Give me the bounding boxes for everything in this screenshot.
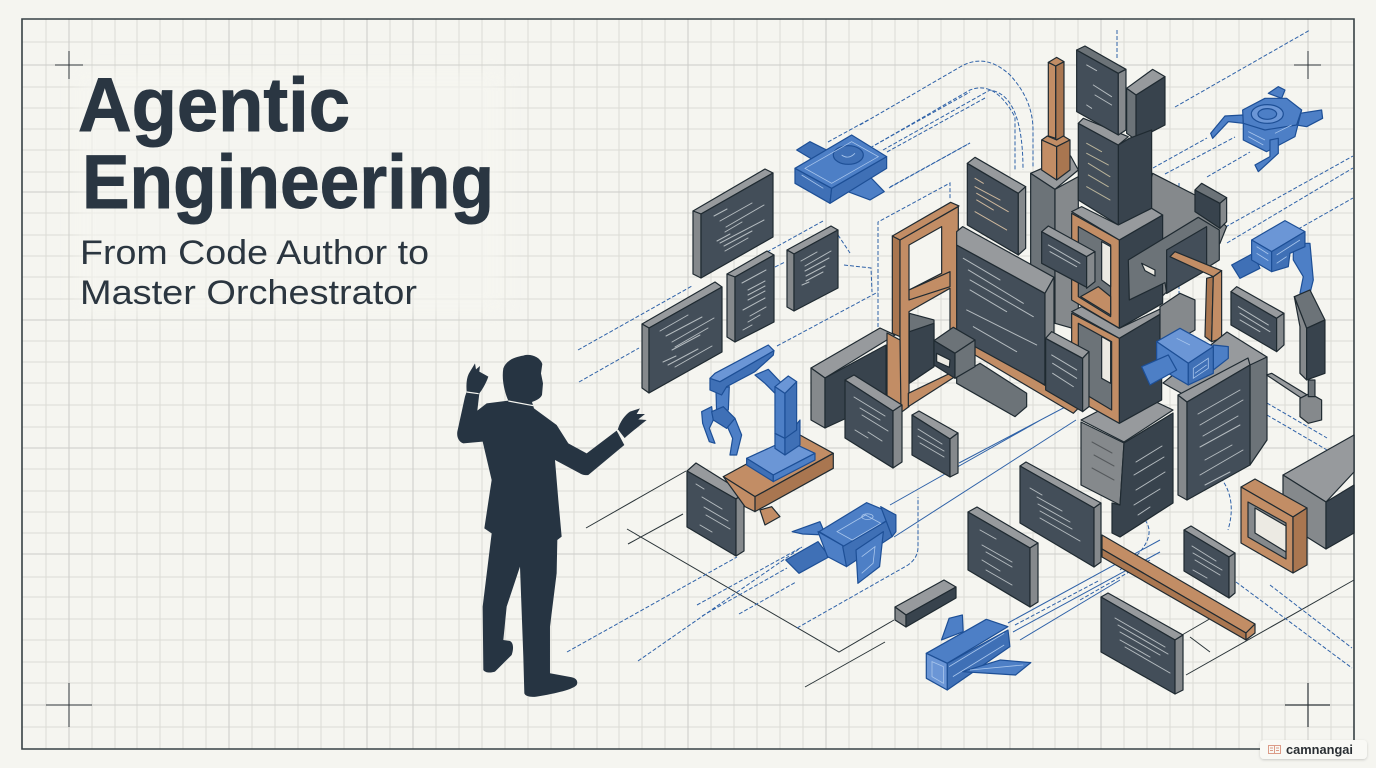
registration cross: bottom right [1285, 683, 1330, 727]
registration cross: top left [55, 51, 83, 79]
construction lines [586, 471, 1354, 687]
subtitle: Master Orchestrator [80, 274, 417, 312]
small grey bar [895, 580, 956, 627]
robotic arm base [723, 435, 833, 525]
watermark badge: camnangai [1286, 742, 1353, 757]
registration cross: top right [1294, 51, 1321, 79]
copper rail and mechanism [934, 227, 1089, 417]
blue machine, tower centre [1142, 328, 1228, 385]
title: Engineering [82, 140, 494, 225]
code panel 1 [693, 169, 773, 278]
subtitle: From Code Author to [80, 234, 429, 272]
title [78, 63, 494, 225]
blue ship top [795, 135, 887, 203]
blue hex robot [1211, 87, 1323, 172]
code panel 9 [968, 507, 1038, 607]
code panel 7 [845, 375, 902, 468]
code panel 10 [1184, 526, 1235, 598]
right grey block [1283, 435, 1354, 549]
code panel 5 [687, 463, 744, 556]
central tower back pieces [967, 46, 1227, 330]
blue ship bottom [926, 615, 1031, 690]
robotic arm blue parts [702, 345, 815, 482]
code panel 8 [1020, 462, 1101, 567]
code panel 3 [787, 226, 838, 311]
person silhouette [457, 355, 647, 697]
code panel 6 [912, 411, 958, 477]
big copper frame with lower-left block [892, 202, 959, 413]
icon: book [1268, 746, 1280, 754]
code panel 11 [1101, 593, 1183, 694]
blue ship middle [786, 503, 896, 583]
long copper beam [1102, 535, 1255, 640]
watermark badge [1260, 740, 1367, 759]
title: Agentic [78, 63, 350, 148]
lower-left grey block [811, 328, 901, 428]
blue camera arm, right [1232, 221, 1313, 293]
grey robotic arm, right [1267, 290, 1325, 423]
copper frame, lower right [1241, 479, 1307, 573]
lower central block [1081, 392, 1173, 537]
code panel 4 [642, 282, 722, 393]
subtitle [80, 234, 429, 312]
dashed connector lines [567, 30, 1353, 668]
large block under right machine [1163, 332, 1267, 500]
code panel 2 [727, 251, 774, 342]
registration cross: bottom left [46, 683, 92, 727]
tower stacked blocks with copper frames [1042, 183, 1284, 423]
